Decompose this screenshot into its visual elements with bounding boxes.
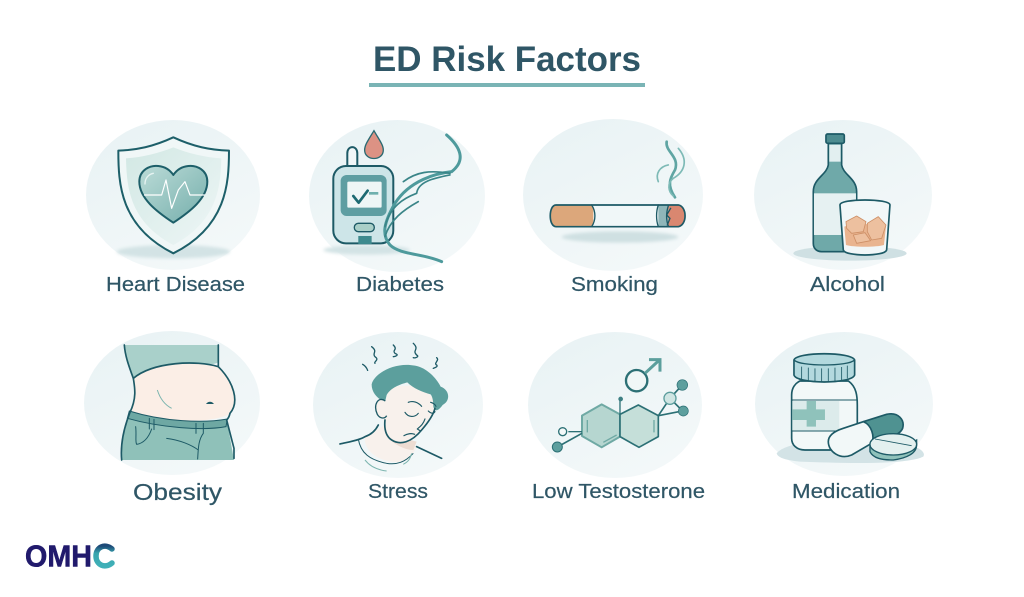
icon: stressed man with squiggles bbox=[340, 343, 448, 471]
panel: smoking bbox=[523, 119, 703, 296]
background circle bbox=[313, 332, 483, 478]
background circle bbox=[86, 120, 260, 270]
label: Obesity: Obesity bbox=[133, 479, 223, 505]
panel: medication bbox=[755, 332, 933, 503]
panel: obesity bbox=[84, 331, 260, 505]
icon: pill bottle, capsule and tablet bbox=[777, 354, 924, 463]
label: Diabetes: Diabetes bbox=[356, 273, 444, 296]
title: ED Risk Factors bbox=[373, 40, 641, 79]
icon: bottle and glass with ice bbox=[793, 134, 907, 261]
background circle bbox=[754, 120, 932, 270]
logo letter C bbox=[96, 546, 112, 566]
label: Heart Disease: Heart Disease bbox=[106, 273, 245, 296]
label: Alcohol: Alcohol bbox=[810, 273, 885, 296]
background circle bbox=[84, 331, 260, 475]
panel: heart disease bbox=[86, 120, 260, 296]
label: Smoking: Smoking bbox=[571, 273, 658, 296]
title underline bbox=[369, 83, 645, 87]
background circle bbox=[309, 120, 485, 272]
panel: stress bbox=[313, 332, 483, 503]
label: Low Testosterone: Low Testosterone bbox=[532, 480, 705, 503]
background circle bbox=[755, 332, 933, 476]
icon: torso with belly and jeans bbox=[121, 345, 235, 460]
label: Medication: Medication bbox=[792, 480, 900, 503]
icon: molecule with male symbol bbox=[552, 360, 688, 452]
logo: OMHC: OMH bbox=[25, 538, 92, 574]
background circle bbox=[523, 119, 703, 271]
panel: low testosterone bbox=[528, 332, 705, 503]
background circle bbox=[528, 332, 702, 478]
icon: shield with heart bbox=[117, 137, 230, 258]
icon: cigarette with smoke bbox=[550, 142, 685, 243]
icon: glucose meter, blood drop and vessels bbox=[323, 131, 460, 262]
panel: alcohol bbox=[754, 120, 932, 296]
panel: diabetes bbox=[309, 120, 485, 296]
label: Stress: Stress bbox=[368, 480, 428, 503]
